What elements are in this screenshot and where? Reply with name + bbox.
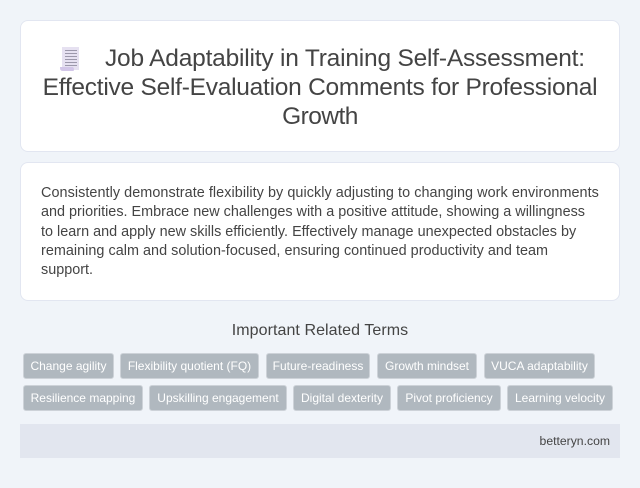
description text: to learn and apply new skills efficiently. Effectively manage unexpected obstacles by <box>41 224 576 240</box>
description text <box>41 185 599 278</box>
tags row 2: Learning velocity <box>515 391 605 405</box>
icon: document scroll <box>60 47 79 71</box>
tags row 2: Pivot proficiency <box>405 391 493 405</box>
tags row 1: Flexibility quotient (FQ) <box>128 359 251 373</box>
description text: Consistently demonstrate flexibility by quickly adjusting to changing work environments <box>41 185 599 201</box>
title <box>43 45 597 130</box>
title: Job Adaptability in Training Self-Assessment: <box>105 45 585 72</box>
description text: remaining calm and solution-focused, ensuring continued productivity and team <box>41 243 548 259</box>
title: Growth <box>282 103 358 130</box>
description text: support. <box>41 262 93 278</box>
tags row 1: VUCA adaptability <box>491 359 588 373</box>
heading: related terms: Important Related Terms <box>232 322 408 339</box>
footer bar <box>20 424 620 458</box>
panel: description card <box>20 162 620 301</box>
title: Effective Self-Evaluation Comments for Professional <box>43 74 597 101</box>
tags row 2 <box>23 385 613 411</box>
description text: and priorities. Embrace new challenges with a positive attitude, showing a willingness <box>41 204 585 220</box>
tags row 1 <box>23 353 595 379</box>
tags row 1: Growth mindset <box>385 359 469 373</box>
footer text: betteryn.com <box>540 434 610 448</box>
tags row 2: Upskilling engagement <box>157 391 279 405</box>
tags row 1: Future-readiness <box>273 359 363 373</box>
panel: title card <box>20 20 620 152</box>
tags row 2: Digital dexterity <box>301 391 383 405</box>
tags row 1: Change agility <box>30 359 107 373</box>
tags row 2: Resilience mapping <box>31 391 135 405</box>
